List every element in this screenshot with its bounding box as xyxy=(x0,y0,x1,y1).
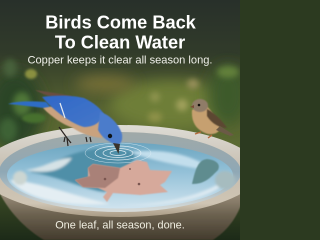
bird reflection xyxy=(192,159,219,184)
head xyxy=(98,112,122,145)
sparrow body xyxy=(192,104,220,134)
white wing stripe xyxy=(60,103,65,118)
copper leaf xyxy=(75,160,172,202)
legs xyxy=(59,127,91,146)
footer caption: One leaf, all season, done. xyxy=(55,220,185,232)
subtitle: Copper keeps it clear all season long. xyxy=(27,54,213,66)
bath underside xyxy=(0,190,245,240)
wing tip feathers xyxy=(35,90,72,100)
sparrow head xyxy=(192,99,208,112)
infographic scene xyxy=(0,0,240,240)
ripples xyxy=(85,143,151,163)
rim inner wall xyxy=(0,132,241,212)
bird bath xyxy=(0,125,259,240)
sparrow eye and beak xyxy=(190,104,200,108)
title: Birds Come Back xyxy=(45,12,197,32)
tail xyxy=(8,101,52,109)
sparrow feet xyxy=(195,132,212,138)
sparrow xyxy=(190,99,234,138)
water surface xyxy=(7,142,233,208)
bath rim xyxy=(0,125,259,217)
bluebird xyxy=(8,90,122,154)
back and wing xyxy=(42,96,104,127)
eye xyxy=(108,134,112,138)
title xyxy=(45,12,197,52)
water reflections xyxy=(10,148,235,205)
blurred garden background xyxy=(0,0,248,240)
title: To Clean Water xyxy=(55,32,185,52)
belly xyxy=(43,105,108,138)
beak xyxy=(113,143,120,154)
sparrow tail xyxy=(216,126,234,136)
sparrow wing xyxy=(207,109,227,128)
